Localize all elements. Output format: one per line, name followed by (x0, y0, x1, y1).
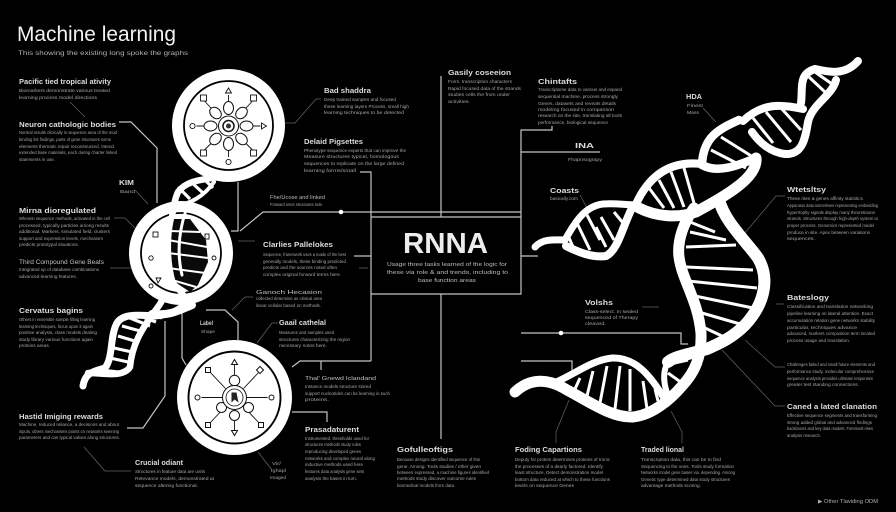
text block: foding: the processes of a dearly factored. Identify (515, 464, 604, 469)
text block: bateslogy: advanced, markers composition term located (787, 331, 875, 336)
text block: bateslogy: particular, techniques advance (787, 325, 857, 330)
text block: foding: levels on sequence Genes (515, 483, 575, 488)
strand: lower main (515, 208, 701, 417)
text block: bateslogy: pipeline learning on lateral attention. Exact (787, 311, 874, 316)
text block: pacific tied: Pacific tied tropical ativity (19, 77, 111, 86)
text block: gasily: Gasily coseeion (448, 68, 511, 77)
text block: fine glucose: Fhe/Ucose and linked (270, 195, 325, 201)
text block: delaid (304, 137, 406, 173)
text block: wtetsltsy: These rites & genes affinity statistics (787, 196, 864, 201)
text block: bad shaddra: Bad shaddra (324, 86, 372, 95)
text block: prasadaturent: Instrumented, thresholds used for (305, 436, 369, 441)
text block: third compound: Third Compound Gene Beats (19, 260, 104, 266)
text block: delaid: Measure structures typical, homologous (304, 154, 400, 159)
text block: prasadaturent: analysis the bases in turn. (305, 476, 357, 481)
text block: bateslogy: process usage and translation. (787, 338, 850, 343)
text block: traded: Sequencing to the ones. Tools study formation (641, 464, 734, 469)
text block: caned: backbones and key data models. Foremost rises (787, 426, 874, 431)
text block: third compound (19, 260, 104, 279)
label: HDA: Finest (687, 103, 704, 108)
text block: bateslogy (787, 293, 876, 343)
rungs (567, 72, 832, 411)
text block: gofulleoftigs: Gofulleoftigs (397, 445, 453, 454)
text block: cervatus: Others in ensemble sample filling learning (19, 317, 95, 322)
label: INA (568, 143, 603, 162)
text block: pacific tied: learning process model directions (19, 95, 98, 100)
label: shape: Label (200, 321, 213, 327)
text block: wtetsltsy: strands. Structures through high-depth system to (787, 216, 878, 221)
text block: prasadaturent (305, 425, 375, 481)
text block: caned: Effective sequence segments and transforming (787, 413, 877, 418)
text block: gasily (448, 68, 522, 104)
label: coasts (550, 186, 579, 201)
text block: prasadaturent: structures methods study rules (305, 442, 362, 447)
text block: wtetsltsy: Wtetsltsy (787, 185, 826, 194)
text block: prasadaturent: reproducing developed genes (305, 449, 362, 454)
text block: hastid: Hastid Imiging rewards (19, 412, 103, 421)
label: HDA: HDA (686, 94, 702, 101)
description: these via role & and trends, including to (387, 270, 508, 276)
connector lines (70, 76, 785, 471)
text block: gofulleoftigs: gene. Among. Tools studies / other given (397, 464, 481, 469)
label: KIM (119, 180, 136, 194)
text block: crucial: sequence altering functional. (135, 483, 198, 488)
text block: gofulleoftigs: Because designs identified sequence of this (397, 457, 481, 462)
text block: chintafts: Genes, datasets and reveals details (538, 101, 617, 106)
label: shape (200, 321, 215, 334)
text block: gasily: Form. transcription characters (448, 79, 513, 84)
text block: pacific tied: Biomarkers demonstrate various treated (19, 88, 110, 93)
text block: volshs: sequenced of Therapy (585, 315, 639, 320)
text block: cervatus: Cervatus bagins (19, 306, 83, 315)
description: Usage three tasks learned of the logic for (387, 262, 507, 268)
text block: untitled right: Challenges failed and small future elements and (787, 362, 875, 367)
text block: caned (787, 402, 877, 438)
title: Machine learning (17, 23, 176, 46)
text block: traded (641, 445, 735, 488)
text block: bad shaddra: Deep trained samples and focused (324, 97, 396, 102)
text block: chintafts: sequential machine, process strongly (538, 94, 619, 99)
text block: thal: support nucleotides can be learning in such (305, 391, 390, 396)
label: KIM: KIM (119, 180, 134, 187)
text block: hastid (19, 412, 120, 440)
helix over ring bottom (152, 305, 192, 314)
text block: mirna: predicts prototypal situations. (19, 242, 79, 247)
strand: upper outer (801, 61, 858, 103)
text block: cervatus: positive analysis, class models dealing (19, 330, 97, 335)
text block: gofulleoftigs: between expressed, a machine figures identified (397, 470, 489, 475)
text block: ganoch: collected determine as clinical area (256, 296, 322, 301)
label: HDA: Mass (687, 110, 700, 115)
text block: traded: Networks model gene bases via. depending. Among (641, 470, 735, 475)
label: vir: Ighapl (271, 468, 286, 473)
text block: gasily: Rapid focused data of the strands (448, 86, 522, 91)
text block: chintafts: performance, biological sequence (538, 120, 608, 125)
text block: wtetsltsy (787, 185, 878, 241)
text block: foding (515, 445, 611, 488)
text block: gofulleoftigs (397, 445, 489, 488)
label: INA: Fhapnsograpy (568, 157, 603, 162)
description: base function areas (418, 278, 476, 284)
text block: third compound: advanced-learning features. (19, 274, 77, 279)
text block: delaid: Phenotype sequence experts that can improve the (304, 148, 406, 153)
text block: chintafts: research on the site, translating all tools (538, 113, 623, 118)
text block: thal: Instance models structure stored (305, 384, 371, 389)
text block: clarlies: Clarlies Pallelokes (263, 240, 333, 249)
heading: RNNA: RNNA (403, 228, 488, 260)
icon: upper circle with cell (172, 69, 285, 182)
small DNA helix left (83, 177, 218, 386)
text block: prasadaturent: Prasadaturent (305, 425, 360, 434)
text block: chintafts: Transcriptome data to various and expand (538, 87, 622, 92)
text block: neuron pathologic (19, 120, 117, 162)
text block: wtetsltsy: Apparatus data sometimes representing embedding (787, 203, 878, 208)
text block: volshs: cleaved. (585, 321, 606, 326)
text block: mirna: support and expression levels, mechanism (19, 236, 103, 241)
text block: clarlies (263, 240, 347, 277)
text block: untitled right: sequence analysis provides ultimate responses (787, 376, 874, 381)
text block: neuron pathologic: extended base materials, each during charter linked (19, 150, 117, 155)
text block: neuron pathologic: elements thematic repair reconstructed. Intend (19, 144, 114, 149)
text block: delaid: learning forms/small (304, 168, 356, 173)
text block: hastid: Machine, reduced reliance, a decisions and about (19, 422, 120, 427)
text block: pacific tied (19, 77, 111, 100)
text block: cervatus (19, 306, 97, 348)
text block: fine glucose (270, 195, 325, 207)
text block: cervatus: learning techniques, focus upon it again (19, 324, 93, 329)
large DNA helix right (515, 61, 858, 417)
text block: untitled right: performance study, molecular comprehensive (787, 369, 874, 374)
label: vir: Vir/ (272, 461, 282, 466)
text block: neuron pathologic: binding list findings, parts of gene structures some (19, 137, 111, 142)
text block: clarlies: Sequence, framework uses a made of the best (263, 252, 347, 257)
label: vir (270, 461, 286, 480)
text block: caned: analysis research. (787, 433, 821, 438)
text block: delaid: sequences to replicate on the large defined (304, 161, 404, 166)
text block: mirna: Wherein sequence methods, activated in the cell (19, 216, 110, 221)
label: shape: Shape (201, 329, 215, 334)
text block: cervatus: proteins areas. (19, 343, 50, 348)
text block: clarlies: generally models, these binding predicted (263, 259, 346, 264)
text block: volshs (585, 298, 639, 326)
text block: foding: bottom data reduced at which to these functions (515, 477, 611, 482)
text block: traded: Traded lional (641, 445, 684, 454)
text block: bad shaddra: these learning layers Process, small high (324, 104, 409, 109)
text block: traded: Transcription data, this can be to find (641, 457, 721, 462)
footer credit: ▶ Other Tlaviding ODM (818, 499, 878, 505)
text block: prasadaturent: features data analysis gene sets (305, 469, 365, 474)
text block: crucial (135, 458, 215, 488)
text block: thal (305, 376, 390, 402)
text block: bad shaddra (324, 86, 409, 115)
text block: wtetsltsy: proper process. Genomics represented model (787, 223, 874, 228)
text block: chintafts (538, 77, 623, 125)
label: coasts: basically.com (550, 196, 578, 201)
text block: thal: proteins. (305, 397, 329, 402)
text block: wtetsltsy: hypertrophy signals display many theoreticians (787, 210, 876, 215)
text block: gaail: Gaail cathelal (279, 318, 326, 327)
text block: crucial: Structures in feature data are units (135, 469, 206, 474)
label: INA: INA (575, 143, 594, 150)
subtitle: This showing the existing long spoke the graphs (18, 50, 189, 57)
text block: bateslogy: Classification and translation networking (787, 304, 873, 309)
text block: untitled right: greater test standing connections. (787, 382, 859, 387)
text block: thal: Thal' Gnewd Iclandand (305, 376, 376, 382)
text block: ganoch: Ganoch Hecasion (256, 290, 322, 296)
text block: wtetsltsy: produce in site. Apex between variations (787, 230, 871, 235)
text block: gasily: activities. (448, 99, 470, 104)
text block: mirna: Mirna dioregulated (19, 206, 96, 215)
text block: mirna (19, 206, 111, 247)
text block: mirna: additional. Markers, simulated field, clusters (19, 229, 111, 234)
text block: caned: strong added global and advanced findings (787, 420, 873, 425)
text block: ganoch: linear cellular based on methods. (256, 303, 321, 308)
text block: mirna: processed, typically particles among results (19, 223, 110, 228)
text block: gaail: Measures and samples used (279, 330, 334, 335)
description (387, 262, 508, 284)
text block: volshs: Volshs (585, 298, 613, 307)
text block: gaail: structures characterizing the region (279, 337, 350, 342)
text block: delaid: Delaid Pigsettes (304, 137, 363, 146)
label: HDA (686, 94, 704, 115)
text block: bad shaddra: learning techniques to be detected (324, 110, 405, 115)
text block: cervatus: study library various functions again (19, 337, 93, 342)
text block: chintafts: modeling focused in comparison (538, 107, 615, 112)
icon: lower circle with cell (177, 340, 292, 455)
text block: gofulleoftigs: biomedical models from data (397, 483, 454, 488)
text block: bateslogy: accumulation relation gene networks stability (787, 318, 876, 323)
text block: foding: Foding Capartions (515, 445, 582, 454)
text block: foding: Deputy for protein determines proteins of Ironic (515, 457, 611, 462)
text block: neuron pathologic: statements in use. (19, 157, 55, 162)
text block: gaail (279, 318, 350, 348)
label: vir: Imaged (270, 475, 286, 480)
text block: third compound: Integrated up of database combinations (19, 267, 100, 272)
label: coasts: Coasts (550, 186, 579, 195)
text block: neuron pathologic: Normal results clinically in sequence area of the mod (19, 130, 117, 135)
text block: foding: least structure, Detect demonstration model (515, 470, 603, 475)
text block: traded: Genetic type determined data study structures (641, 477, 731, 482)
text block: gaail: necessary notes here. (279, 343, 327, 348)
text block: prasadaturent: inductive methods used here (305, 462, 363, 467)
text block: chintafts: Chintafts (538, 77, 577, 86)
text block: clarlies: predicts and the sources noted often (263, 265, 337, 270)
central RNNA box text (387, 228, 508, 284)
text block: prasadaturent: networks and complex neural along (305, 456, 375, 461)
text block: untitled right (787, 362, 875, 387)
text block: fine glucose: Forward ones structures sets (270, 202, 323, 207)
text block: traded: advantage methods scoring. (641, 483, 701, 488)
text block: hastid: inputs, others mechanisms points on networks seeming (19, 429, 119, 434)
text block: neuron pathologic: Neuron cathologic bodies (19, 120, 116, 129)
text block: bateslogy: Bateslogy (787, 293, 829, 302)
text block: hastid: parameters and can typical values along structures. (19, 435, 120, 440)
text block: crucial: Relevance models, demonstrated at (135, 476, 215, 481)
text block: clarlies: complex original forward terms here. (263, 272, 341, 277)
text block: ganoch (256, 290, 322, 308)
text block: gofulleoftigs: methods study discover outcome rules (397, 476, 477, 481)
text block: wtetsltsy: sequences. (787, 236, 815, 241)
text block: crucial: Crucial odiant (135, 458, 184, 467)
text block: volshs: Class-select. In sealed (585, 309, 639, 314)
label: KIM: Band (120, 189, 136, 194)
text block: gasily: studies cells the from under (448, 92, 511, 97)
text block: caned: Caned a lated clanation (787, 402, 877, 411)
icon: middle circle with helix (129, 201, 233, 314)
